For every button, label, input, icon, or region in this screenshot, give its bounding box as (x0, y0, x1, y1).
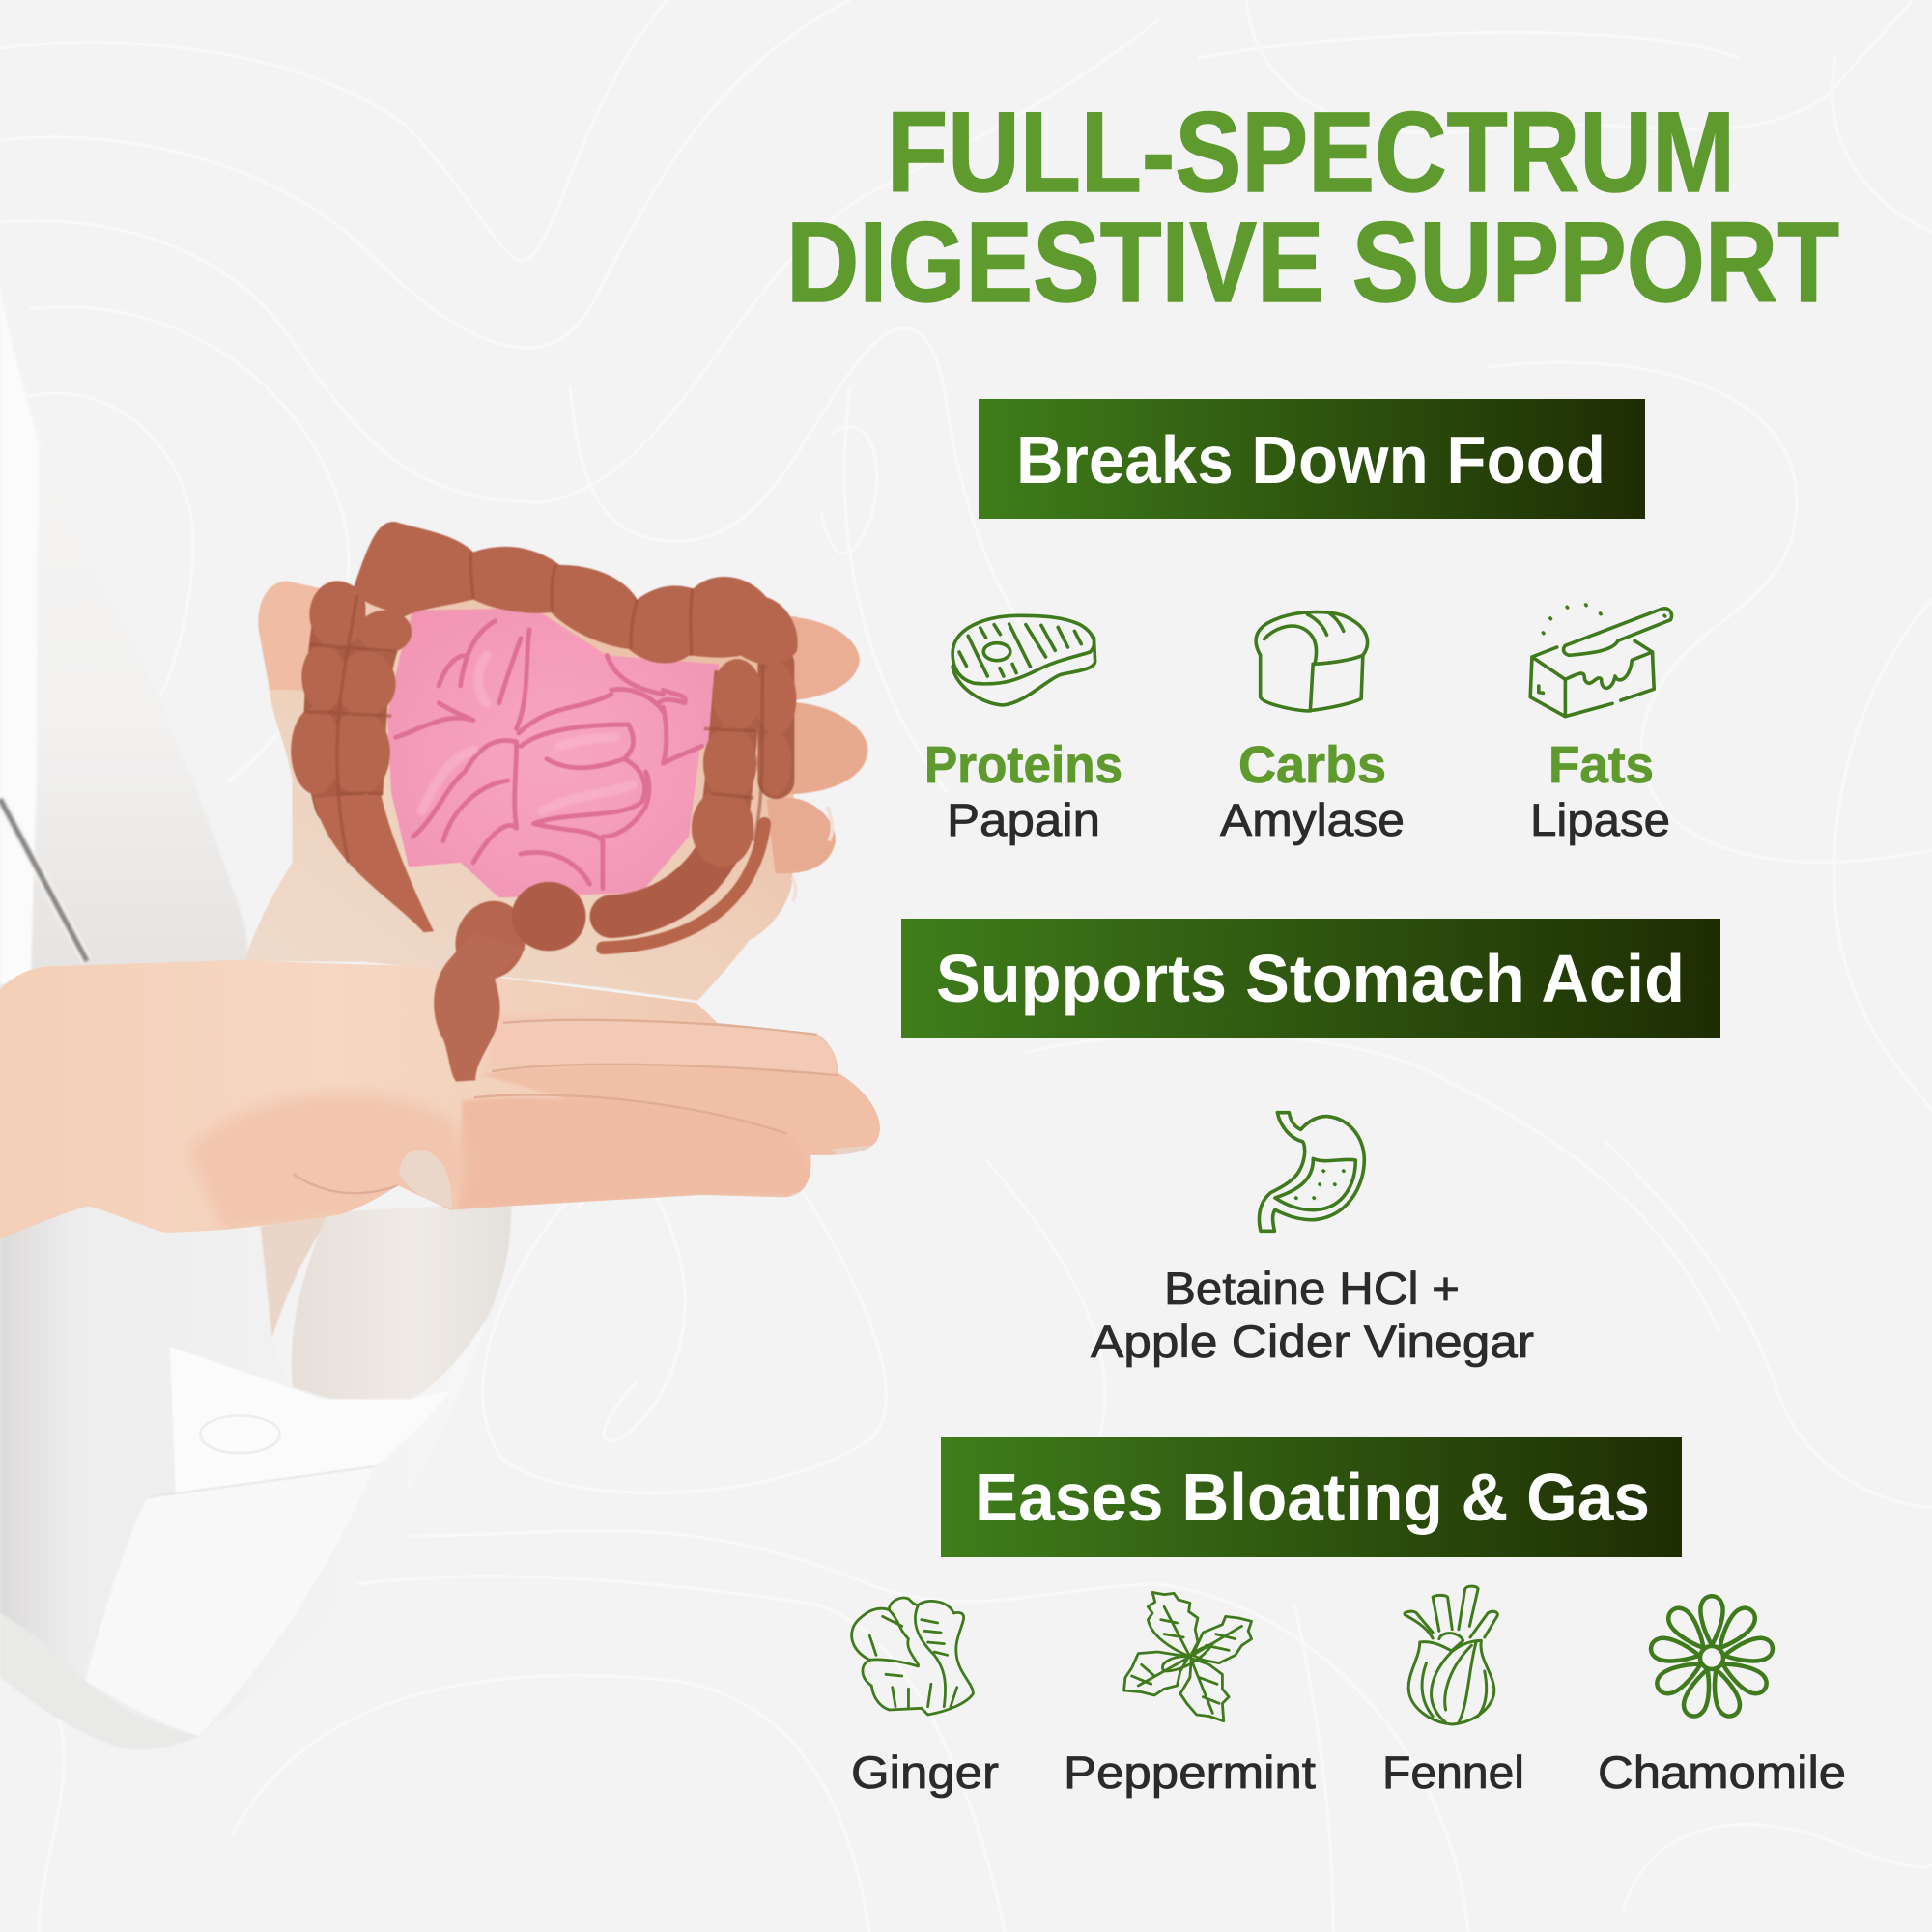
label: carbs: Carbs (1238, 736, 1386, 794)
label: proteins (924, 736, 1122, 845)
small intestine (387, 608, 719, 897)
text: betaine hci and apple cider vinegar: Betaine HCl + (1164, 1263, 1460, 1314)
label: chamomile: Chamomile (1598, 1747, 1846, 1798)
icon: bread (1256, 612, 1368, 711)
label: carbs (1220, 736, 1405, 845)
label: peppermint: Peppermint (1064, 1747, 1316, 1798)
icon: peppermint (1124, 1592, 1252, 1721)
title (786, 89, 1839, 327)
banner: breaks down food: Breaks Down Food (1016, 422, 1605, 497)
icon: ginger (852, 1598, 973, 1715)
label: ginger: Ginger (851, 1747, 999, 1798)
label: proteins: Proteins (924, 736, 1122, 794)
banner: eases bloating and gas (941, 1437, 1682, 1557)
text: betaine hci and apple cider vinegar: Apple Cider Vinegar (1091, 1316, 1534, 1367)
icon: fennel (1405, 1586, 1497, 1724)
title: FULL-SPECTRUM (887, 89, 1735, 216)
text: betaine hci and apple cider vinegar (1091, 1263, 1534, 1367)
label: carbs: Amylase (1220, 794, 1405, 845)
icon: steak (952, 615, 1095, 705)
photo: hands holding intestine model (0, 521, 880, 1748)
banner: breaks down food (979, 399, 1645, 519)
coat upper (0, 280, 253, 1024)
icon: butter (1530, 605, 1672, 717)
large intestine (291, 522, 798, 1082)
upper hand (244, 582, 867, 1001)
label: proteins: Papain (947, 794, 1100, 845)
icon: stomach (1259, 1113, 1364, 1231)
banner: supports stomach acid (901, 919, 1720, 1038)
lower hand (0, 960, 880, 1239)
banner: eases bloating and gas: Eases Bloating & Gas (975, 1460, 1650, 1535)
lower sleeve and cuff (0, 1203, 511, 1749)
label: fats: Fats (1548, 736, 1654, 794)
icon: chamomile (1649, 1596, 1775, 1719)
banner: supports stomach acid: Supports Stomach Acid (936, 941, 1685, 1016)
label: fats (1530, 736, 1670, 845)
label: fennel: Fennel (1382, 1747, 1524, 1798)
label: fats: Lipase (1530, 794, 1670, 845)
intestine model (291, 522, 798, 1082)
